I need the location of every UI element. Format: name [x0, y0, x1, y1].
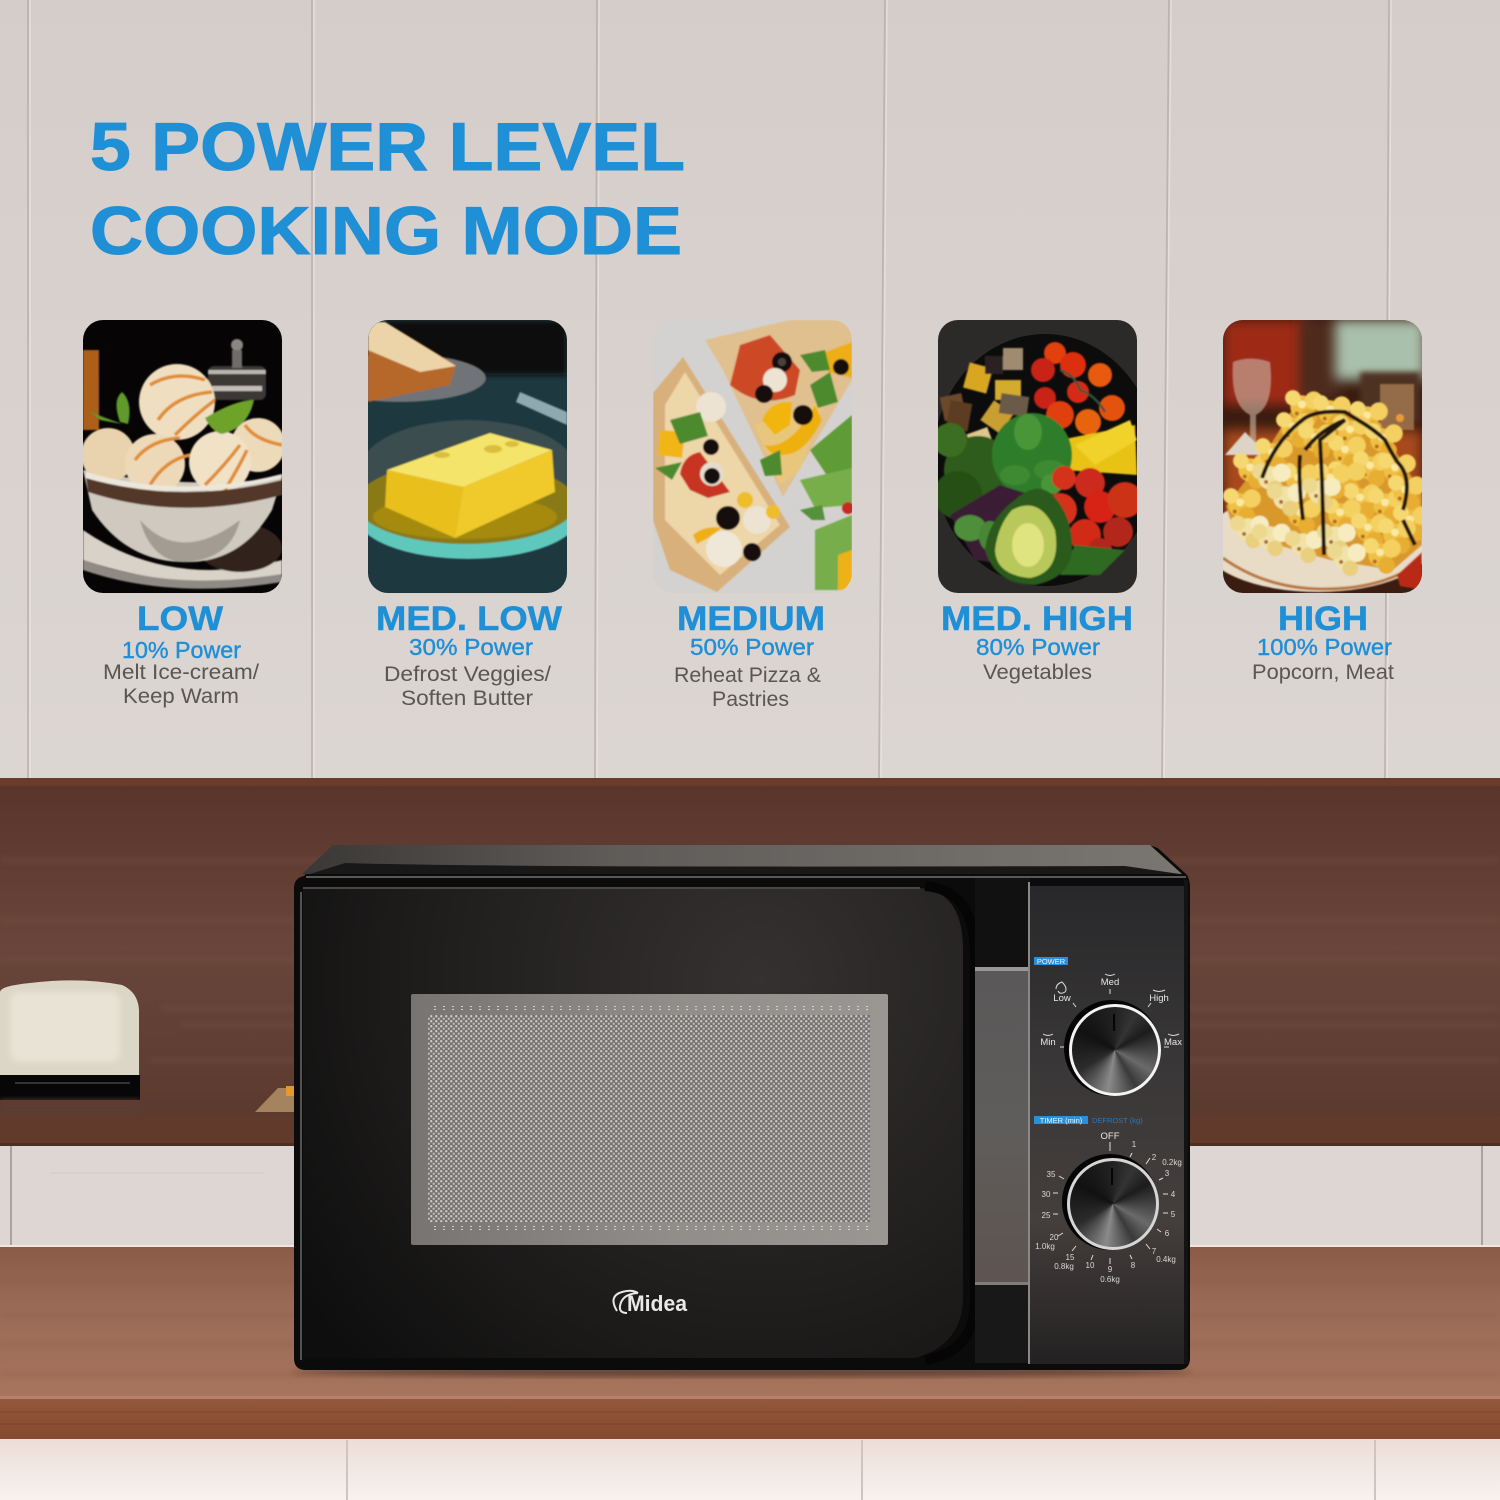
level: low: Melt Ice-cream/: [103, 661, 259, 684]
wood backsplash: [0, 778, 1500, 1120]
timer dial labels: 0.4kg: [1156, 1255, 1176, 1264]
power dial pointer: [1113, 1014, 1115, 1031]
timer dial labels: 35: [1047, 1170, 1056, 1179]
timer dial labels: 0.8kg: [1054, 1262, 1074, 1271]
timer dial labels: 5: [1171, 1210, 1176, 1219]
level: medium: Pastries: [712, 688, 789, 711]
timer dial labels: 0.2kg: [1162, 1158, 1182, 1167]
timer dial labels: 1.0kg: [1035, 1242, 1055, 1251]
timer dial labels: 20: [1050, 1233, 1059, 1242]
power dial labels: High: [1149, 993, 1169, 1004]
microwave window: [411, 994, 888, 1245]
level: medium low: MED. LOW: [376, 600, 563, 638]
timer dial pointer: [1111, 1168, 1113, 1185]
timer dial labels: 8: [1131, 1261, 1136, 1270]
timer dial labels: 6: [1165, 1229, 1170, 1238]
level: high: 100% Power: [1257, 634, 1392, 660]
timer dial labels: [1034, 1116, 1182, 1284]
level: high: HIGH: [1278, 600, 1368, 638]
level: low: LOW: [137, 600, 224, 638]
wooden counter top: [0, 1245, 1500, 1439]
power dial labels: [1034, 957, 1182, 1048]
timer dial labels: 3: [1165, 1169, 1170, 1178]
photo: popcorn: [1223, 320, 1422, 593]
level: medium: [674, 600, 825, 711]
timer dial labels: 4: [1171, 1190, 1176, 1199]
shelf ledge: [0, 1116, 1500, 1146]
level: high: Popcorn, Meat: [1252, 661, 1394, 684]
timer dial labels: 25: [1042, 1211, 1051, 1220]
timer dial labels: TIMER (min): [1040, 1116, 1083, 1125]
small object behind the microwave: [255, 1086, 294, 1112]
timer dial labels: 0.6kg: [1100, 1275, 1120, 1284]
photo: pizza: [653, 320, 854, 593]
power dial labels: Low: [1053, 993, 1071, 1004]
level: medium: MEDIUM: [677, 600, 825, 638]
microwave door: [303, 888, 963, 1358]
level: medium high: 80% Power: [976, 634, 1100, 660]
control panel: [1030, 886, 1184, 1364]
timer dial labels: OFF: [1100, 1131, 1120, 1142]
power dial labels: POWER: [1037, 957, 1066, 966]
level: medium low: 30% Power: [409, 634, 533, 660]
level: low: [103, 600, 259, 708]
level: low: 10% Power: [122, 637, 241, 663]
cabinet below counter: [0, 1439, 1500, 1500]
toaster on the shelf: [0, 980, 140, 1116]
timer dial labels: 1: [1132, 1140, 1137, 1149]
title: 5 POWER LEVEL: [90, 109, 685, 185]
power dial labels: Med: [1101, 977, 1119, 988]
title: [90, 109, 685, 269]
level: medium low: Soften Butter: [401, 687, 533, 710]
power dial labels: Min: [1040, 1037, 1056, 1048]
handle strip: [975, 878, 1030, 1363]
timer dial labels: 10: [1086, 1261, 1095, 1270]
microwave oven: [292, 845, 1192, 1377]
level: medium: 50% Power: [690, 634, 814, 660]
timer dial labels: 15: [1066, 1253, 1075, 1262]
level: medium: Reheat Pizza &: [674, 664, 821, 687]
timer dial labels: 30: [1042, 1190, 1051, 1199]
microwave body: [294, 845, 1190, 1370]
level: medium high: MED. HIGH: [941, 600, 1133, 638]
door curved edge: [925, 886, 975, 1360]
timer dial labels: 9: [1108, 1265, 1113, 1274]
power dial labels: Max: [1164, 1037, 1182, 1048]
level: high: [1252, 600, 1394, 684]
photo: ice cream: [81, 320, 285, 593]
photo: vegetable bowl: [938, 320, 1137, 593]
timer dial: [1067, 1158, 1159, 1250]
power dial: [1069, 1004, 1161, 1096]
microwave top surface: [302, 845, 1182, 874]
white lower cabinets: [0, 1146, 1500, 1246]
level: medium low: Defrost Veggies/: [384, 663, 551, 686]
photo: butter: [368, 320, 567, 593]
level: low: Keep Warm: [123, 685, 239, 708]
dial shadows: [1062, 1000, 1160, 1250]
level: medium high: [941, 600, 1133, 684]
timer dial labels: 2: [1152, 1153, 1157, 1162]
timer dial labels: DEFROST (kg): [1092, 1116, 1143, 1125]
title: COOKING MODE: [90, 193, 682, 269]
wall background: [0, 0, 1500, 780]
timer dial labels: 7: [1152, 1247, 1157, 1256]
level: medium low: [376, 600, 563, 710]
brand logo: Midea: [627, 1291, 688, 1316]
level: medium high: Vegetables: [983, 661, 1092, 684]
